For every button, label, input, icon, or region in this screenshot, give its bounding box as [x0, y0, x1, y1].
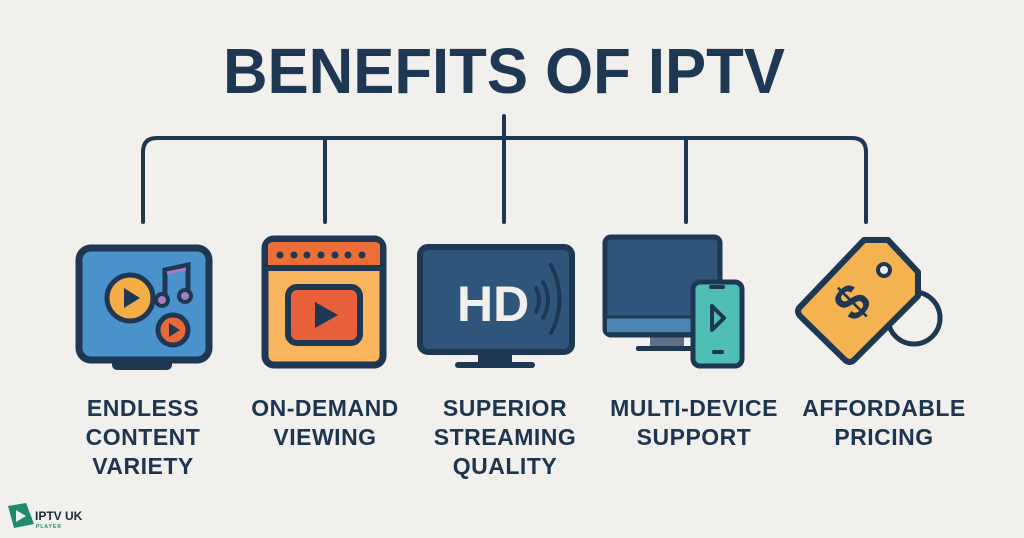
logo: [8, 503, 83, 530]
icon: HD TV: HD: [457, 276, 529, 332]
label: endless content variety: CONTENT: [86, 424, 200, 450]
labels: [86, 395, 966, 479]
icon: HD TV: [420, 247, 572, 368]
icon: content variety TV: [79, 248, 209, 370]
title: BENEFITS OF IPTV: [223, 35, 785, 107]
icon: on-demand browser: [265, 239, 383, 365]
label: endless content variety: ENDLESS: [87, 395, 199, 421]
label: superior streaming quality: STREAMING: [434, 424, 576, 450]
label: affordable pricing: PRICING: [834, 424, 934, 450]
label: multi-device support: SUPPORT: [637, 424, 751, 450]
logo: IPTV UK: [35, 509, 83, 523]
icon: multi-device: [605, 237, 742, 366]
label: endless content variety: VARIETY: [92, 453, 194, 479]
logo: PLAYER: [36, 524, 62, 530]
label: affordable pricing: AFFORDABLE: [802, 395, 966, 421]
label: on-demand viewing: VIEWING: [273, 424, 377, 450]
icon: price tag: $: [822, 272, 882, 332]
label: superior streaming quality: QUALITY: [453, 453, 557, 479]
label: multi-device support: MULTI-DEVICE: [610, 395, 778, 421]
icon: price tag: [798, 240, 940, 362]
label: superior streaming quality: SUPERIOR: [443, 395, 567, 421]
connector tree: [143, 116, 866, 222]
label: on-demand viewing: ON-DEMAND: [251, 395, 399, 421]
